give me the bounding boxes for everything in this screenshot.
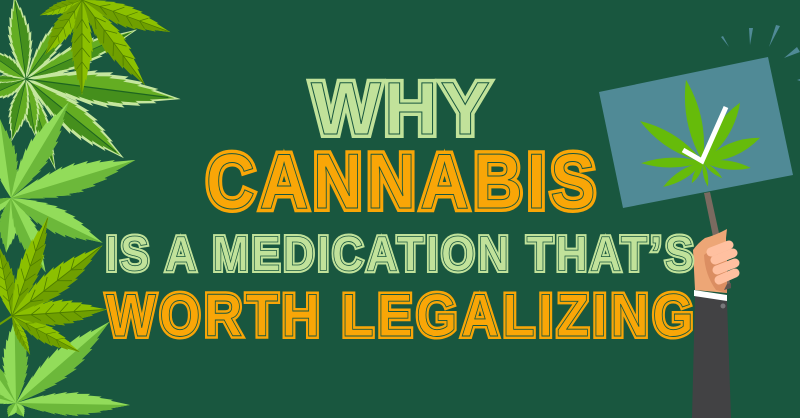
icon: olive cannabis leaf, top <box>37 0 174 95</box>
title line: CANNABIS: CANNABIS <box>206 137 600 225</box>
title line: IS A MEDICATION THAT'S: IS A MEDICATION THAT’S <box>106 226 696 282</box>
icon: olive cannabis leaf, lower left <box>0 213 111 360</box>
title line: WORTH LEGALIZING: WORTH LEGALIZING <box>106 282 697 349</box>
icon: burst rays above the sign <box>721 25 800 81</box>
icon: hand holding the pole <box>693 229 735 293</box>
icon: shirt cuff and button <box>694 290 727 308</box>
icon: pale cannabis leaf, top left <box>0 0 183 173</box>
icon: sign pole <box>704 192 731 290</box>
icon: white check mark <box>683 107 726 161</box>
icon: green leaf on sign <box>637 78 763 191</box>
title line: WHY: WHY <box>311 67 493 150</box>
title line: CANNABIS: CANNABIS <box>206 137 600 225</box>
title line: WHY: WHY <box>311 67 493 150</box>
title line: IS A MEDICATION THAT'S: IS A MEDICATION THAT’S <box>106 226 696 282</box>
title line: WORTH LEGALIZING: WORTH LEGALIZING <box>106 282 697 349</box>
panel: protest sign <box>599 57 793 208</box>
icon: suit sleeve <box>692 296 731 418</box>
icon: bright cannabis leaf, middle left <box>0 95 140 277</box>
icon: bright cannabis leaf, bottom left <box>0 311 130 418</box>
